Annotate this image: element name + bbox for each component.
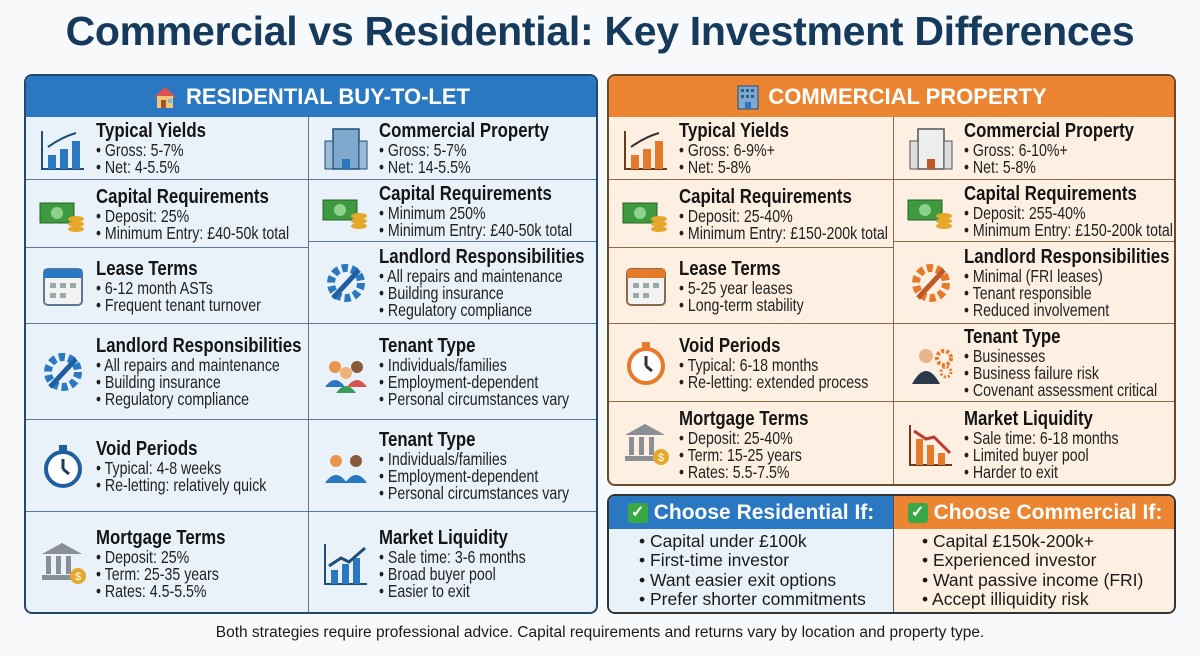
com right: capital: Minimum Entry: £150-200k total xyxy=(973,220,1173,240)
commercial header: COMMERCIAL PROPERTY xyxy=(768,84,1047,108)
res left: mortgage: Deposit: 25% xyxy=(105,546,189,566)
res left: mortgage: Rates: 4.5-5.5% xyxy=(105,580,207,600)
res right: tenant type xyxy=(309,324,600,420)
res right: landlord: Landlord Responsibilities xyxy=(379,245,584,268)
com left: void periods xyxy=(609,324,894,402)
com left: capital: Capital Requirements xyxy=(679,184,852,208)
res right: commercial property: Gross: 5-7% xyxy=(388,140,467,160)
com right: commercial property: Net: 5-8% xyxy=(973,157,1036,177)
com right: capital xyxy=(894,180,1178,242)
res left: capital xyxy=(26,180,309,248)
com right: capital: Deposit: 255-40% xyxy=(973,202,1086,222)
footer note: Both strategies require professional advice. Capital requirements and returns vary by location and property type. xyxy=(216,624,984,641)
choose residential list: First-time investor xyxy=(650,550,789,570)
res left: capital: Deposit: 25% xyxy=(105,206,189,226)
com right: tenant type: Businesses xyxy=(973,346,1045,366)
res right: market liquidity: Sale time: 3-6 months xyxy=(388,546,526,566)
com right: landlord: Tenant responsible xyxy=(973,283,1092,303)
com left: lease terms: 5-25 year leases xyxy=(688,278,793,298)
res left: lease terms xyxy=(26,248,309,324)
res left: mortgage: Mortgage Terms xyxy=(96,526,226,548)
panel: commercial xyxy=(607,74,1176,486)
res right: tenant type: Tenant Type xyxy=(379,334,476,357)
choose commercial list: Want passive income (FRI) xyxy=(933,570,1143,590)
choose commercial header xyxy=(894,496,1176,529)
res right: tenant type: Individuals/families xyxy=(388,355,507,375)
com left: mortgage xyxy=(609,402,894,486)
com left: void periods: Void Periods xyxy=(679,334,781,356)
com left: mortgage: Rates: 5.5-7.5% xyxy=(688,462,790,482)
choose residential xyxy=(609,496,894,614)
choose commercial header: Choose Commercial If: xyxy=(934,500,1162,524)
res left: typical yields: Net: 4-5.5% xyxy=(105,157,180,177)
res left: mortgage: Term: 25-35 years xyxy=(105,564,219,584)
res left: typical yields: Typical Yields xyxy=(96,119,206,142)
panel: choose xyxy=(607,494,1176,614)
com left: lease terms xyxy=(609,248,894,324)
com left: lease terms: Long-term stability xyxy=(688,294,804,314)
res right: tenant type 2: Individuals/families xyxy=(388,449,507,469)
res left: capital: Capital Requirements xyxy=(96,184,269,208)
res left: lease terms: Lease Terms xyxy=(96,256,198,280)
com right: tenant type: Tenant Type xyxy=(964,325,1061,348)
title: Commercial vs Residential: Key Investment Differences xyxy=(66,8,1134,54)
res left: lease terms: 6-12 month ASTs xyxy=(105,278,213,298)
res right: tenant type 2: Personal circumstances vary xyxy=(388,483,569,503)
res right: landlord: Regulatory compliance xyxy=(388,300,532,320)
choose residential list: Want easier exit options xyxy=(650,570,836,590)
res right: market liquidity: Market Liquidity xyxy=(379,526,508,548)
choose residential list xyxy=(640,531,866,609)
choose residential list: Capital under £100k xyxy=(650,531,807,551)
res right: landlord: Building insurance xyxy=(388,283,504,303)
com left: void periods: Re-letting: extended process xyxy=(688,372,868,392)
res right: commercial property: Commercial Property xyxy=(379,119,549,142)
com right: tenant type: Business failure risk xyxy=(973,363,1099,383)
res left: void periods: Void Periods xyxy=(96,436,198,460)
commercial header xyxy=(609,76,1174,117)
com left: mortgage: Term: 15-25 years xyxy=(688,444,802,464)
com right: tenant type: Covenant assessment critical xyxy=(973,380,1157,400)
res left: void periods: Typical: 4-8 weeks xyxy=(105,458,221,478)
res left: mortgage xyxy=(26,512,309,614)
com right: landlord: Minimal (FRI leases) xyxy=(973,266,1103,286)
res right: landlord xyxy=(309,242,600,324)
res left: capital: Minimum Entry: £40-50k total xyxy=(105,222,289,242)
res right: capital: Minimum Entry: £40-50k total xyxy=(388,220,572,240)
res right: market liquidity: Easier to exit xyxy=(388,580,470,600)
choose commercial xyxy=(894,496,1176,614)
res left: typical yields: Gross: 5-7% xyxy=(105,140,184,160)
choose commercial list: Capital £150k-200k+ xyxy=(933,531,1094,551)
com left: typical yields: Typical Yields xyxy=(679,119,789,142)
res left: lease terms: Frequent tenant turnover xyxy=(105,294,261,314)
res right: tenant type 2: Employment-dependent xyxy=(388,466,538,486)
com right: market liquidity: Market Liquidity xyxy=(964,406,1093,430)
com right: commercial property: Commercial Property xyxy=(964,119,1134,142)
com left: lease terms: Lease Terms xyxy=(679,256,781,280)
com right: tenant type xyxy=(894,324,1178,402)
com right: market liquidity: Limited buyer pool xyxy=(973,444,1089,464)
com right: market liquidity: Harder to exit xyxy=(973,462,1058,482)
res right: landlord: All repairs and maintenance xyxy=(387,266,563,286)
choose residential header xyxy=(609,496,893,529)
res right: market liquidity: Broad buyer pool xyxy=(388,564,496,584)
choose commercial list: Accept illiquidity risk xyxy=(932,589,1089,609)
com right: market liquidity xyxy=(909,406,1119,482)
res left: landlord: Building insurance xyxy=(105,372,221,392)
com right: landlord: Reduced involvement xyxy=(973,300,1109,320)
choose commercial list xyxy=(922,531,1143,609)
com right: commercial property xyxy=(894,117,1178,180)
com left: capital: Minimum Entry: £150-200k total xyxy=(688,222,888,242)
com left: capital xyxy=(609,180,894,248)
res left: landlord: Landlord Responsibilities xyxy=(96,334,301,357)
res right: tenant type 2 xyxy=(309,420,600,512)
res right: market liquidity xyxy=(324,526,526,600)
choose commercial header: ✓ xyxy=(911,504,924,520)
res left: void periods xyxy=(26,420,309,512)
res right: capital xyxy=(309,180,600,242)
residential header: RESIDENTIAL BUY-TO-LET xyxy=(186,84,470,108)
choose residential header: Choose Residential If: xyxy=(654,500,874,524)
res right: commercial property xyxy=(309,117,600,180)
choose residential header: ✓ xyxy=(631,504,644,520)
com left: mortgage: Deposit: 25-40% xyxy=(688,428,793,448)
com left: typical yields: Net: 5-8% xyxy=(688,157,751,177)
res left: mortgage: $ xyxy=(75,571,81,583)
com left: typical yields: Gross: 6-9%+ xyxy=(688,140,775,160)
com right: capital: Capital Requirements xyxy=(964,182,1137,204)
com left: mortgage: Mortgage Terms xyxy=(679,406,809,430)
com left: void periods: Typical: 6-18 months xyxy=(688,354,818,374)
res right: tenant type: Employment-dependent xyxy=(388,372,538,392)
res left: void periods: Re-letting: relatively quick xyxy=(105,474,266,494)
com right: landlord xyxy=(894,242,1178,324)
res left: landlord: All repairs and maintenance xyxy=(104,355,280,375)
choose residential list: Prefer shorter commitments xyxy=(650,589,866,609)
res left: landlord xyxy=(26,324,309,420)
res right: capital: Capital Requirements xyxy=(379,182,552,204)
choose commercial list: Experienced investor xyxy=(933,550,1096,570)
res right: tenant type: Personal circumstances vary xyxy=(388,389,569,409)
com left: mortgage: $ xyxy=(658,452,664,464)
res right: commercial property: Net: 14-5.5% xyxy=(388,157,471,177)
res left: landlord: Regulatory compliance xyxy=(105,389,249,409)
res right: capital: Minimum 250% xyxy=(388,202,486,222)
com left: typical yields xyxy=(609,117,894,180)
residential header xyxy=(26,76,596,117)
com right: commercial property: Gross: 6-10%+ xyxy=(973,140,1068,160)
res left: typical yields xyxy=(26,117,309,180)
res right: tenant type 2: Tenant Type xyxy=(379,428,476,451)
com left: capital: Deposit: 25-40% xyxy=(688,206,793,226)
com right: market liquidity: Sale time: 6-18 months xyxy=(973,428,1119,448)
com right: landlord: Landlord Responsibilities xyxy=(964,245,1169,268)
panel: residential xyxy=(24,74,598,614)
